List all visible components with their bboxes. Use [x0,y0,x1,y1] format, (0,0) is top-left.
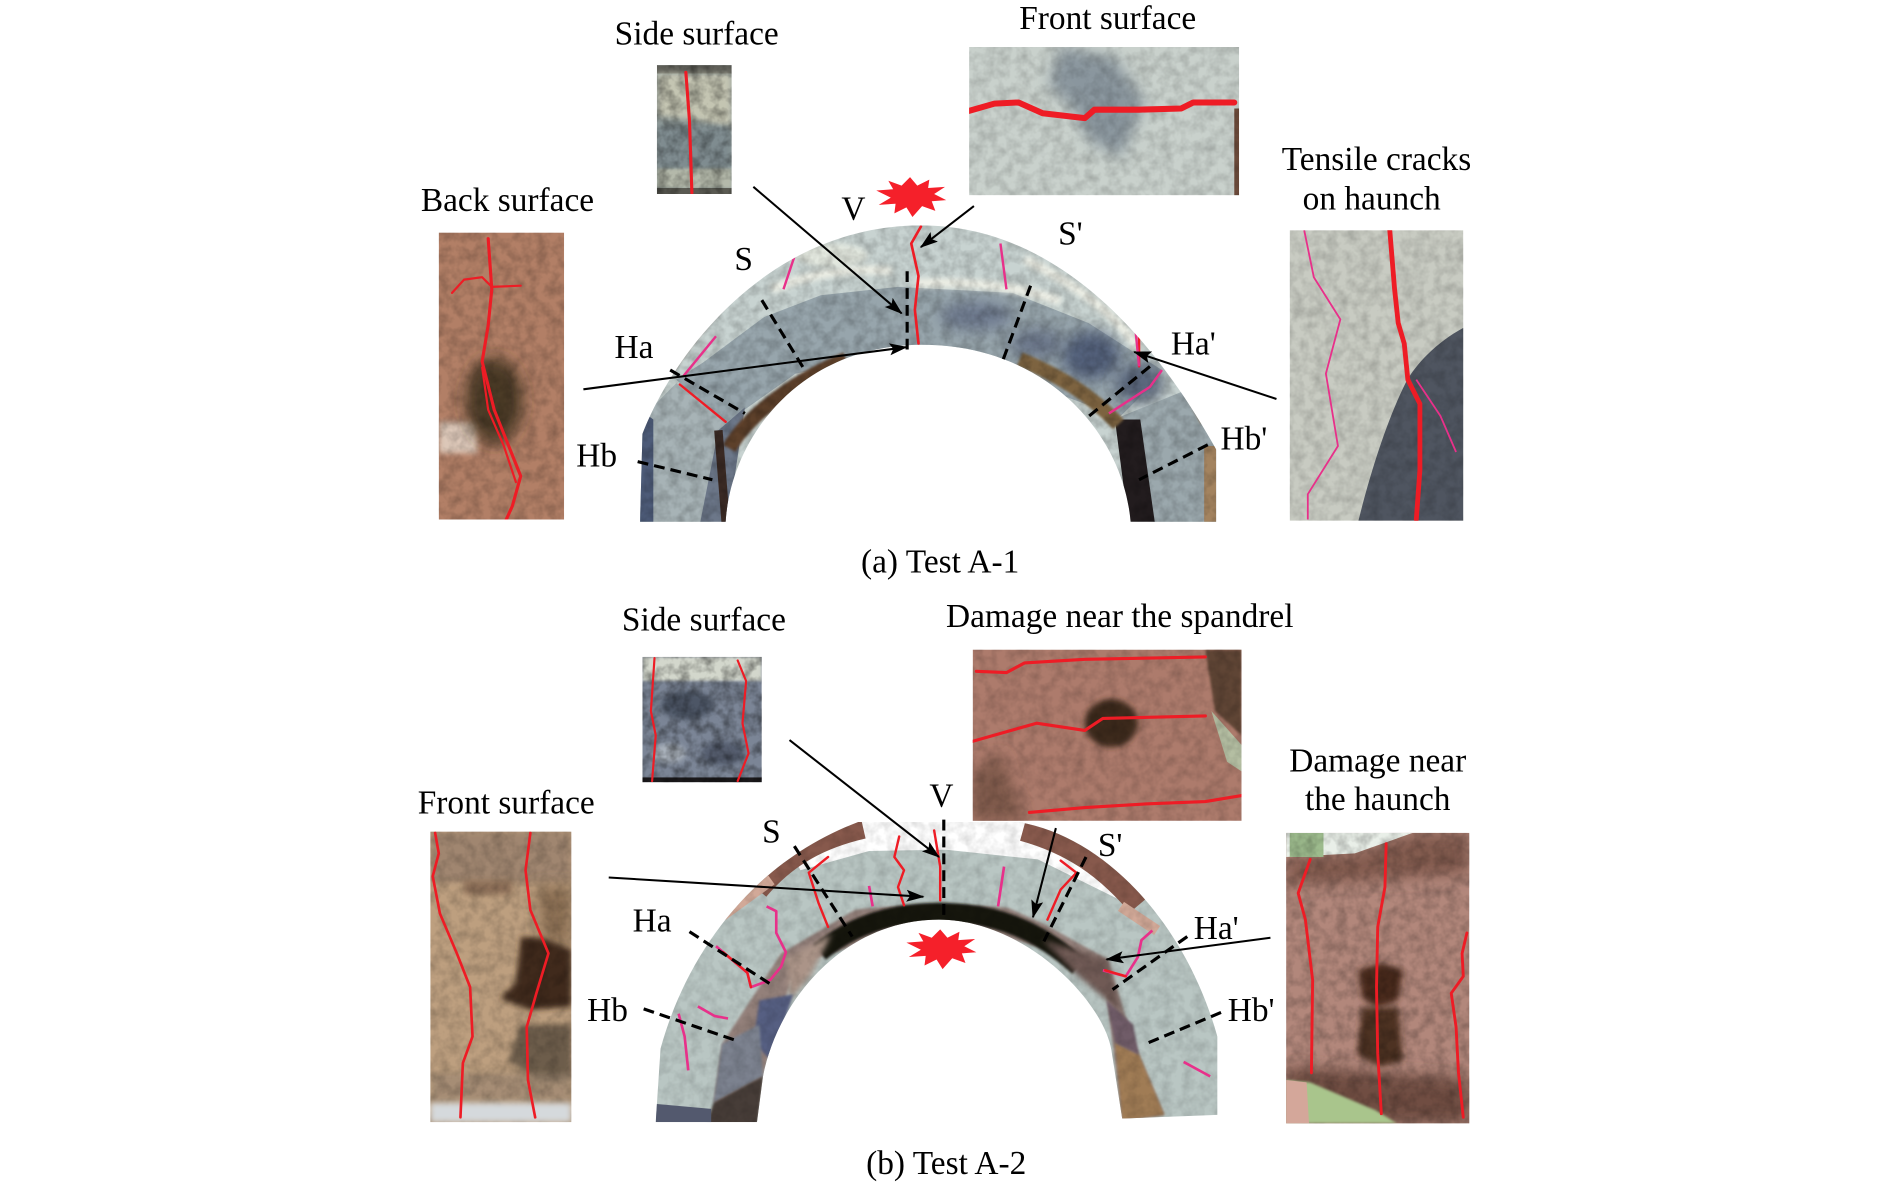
heading: tensile cracks on haunch: on haunch [1303,181,1441,218]
panel: Test A-1 [421,0,1471,581]
heading: damage near the haunch: the haunch [1305,781,1451,818]
icon: impact burst A-1 [876,177,946,217]
caption: Test A-2: (b) Test A-2 [866,1145,1026,1182]
photo: tensile cracks on haunch [1290,230,1463,521]
arrow: haunch damage [1107,938,1270,959]
heading: side surface A-2: Side surface [622,601,786,638]
heading: damage near the spandrel: Damage near the spandrel [946,598,1294,635]
photo: damage near the spandrel [973,650,1242,821]
section lines A-1 [638,271,1208,480]
section labels A-2: S [762,814,781,851]
photo: front surface A-1 [969,47,1239,195]
arrow: tensile cracks to haunch [1134,352,1276,399]
section labels A-1: V [841,190,865,227]
photo: side surface A-1 [657,65,732,194]
arch lower right block [1120,391,1220,522]
arch photo A-2 [645,814,1229,1127]
section labels A-2: V [929,777,953,814]
arrow: spandrel damage [1033,828,1056,917]
arrow: side surface to crown [753,187,902,313]
section labels A-1: Hb [576,437,617,474]
section labels A-1: S' [1058,216,1083,253]
arch brown rim [753,822,1143,902]
section labels A-2: Ha [633,903,672,940]
heading: tensile cracks on haunch [1282,141,1471,218]
section labels A-1: Ha' [1171,325,1216,362]
arrow: front surface to crown [921,206,974,247]
heading: side surface A-1: Side surface [615,16,779,53]
heading: front surface A-2: Front surface [418,785,595,822]
heading: front surface A-1: Front surface [1019,0,1196,37]
arch dark band over crown [820,912,1079,967]
heading: back surface: Back surface [421,182,594,219]
arch lower left block [636,383,745,522]
arch photo A-1 [633,217,1223,530]
arch intrados face [676,287,1162,423]
section labels A-2: Ha' [1194,910,1239,947]
panel: Test A-2 [418,598,1469,1182]
arch white top zone [794,822,1132,898]
arrow: side surface to crown [790,740,939,857]
photo: front surface A-2 [430,832,571,1122]
photo: side surface A-2 [642,657,762,782]
section labels A-2: Hb [587,992,628,1029]
heading: damage near the haunch: Damage near [1289,742,1466,779]
photo: back surface [439,233,564,519]
heading: tensile cracks on haunch: Tensile cracks [1282,141,1471,178]
arrow: front surface to intrados [609,877,923,897]
section labels A-1: Ha [615,329,654,366]
section labels A-2: S' [1098,827,1122,864]
section labels A-2 [587,777,1275,1029]
section lines A-2 [644,820,1221,1043]
caption: Test A-1: (a) Test A-1 [861,544,1019,581]
section labels A-1 [576,190,1267,474]
arch cracks [809,830,1076,927]
icon: impact burst A-2 [906,929,976,969]
section labels A-2: Hb' [1228,992,1275,1029]
arch cracks [911,227,921,344]
arch brown edges [729,359,846,448]
section labels A-1: Hb' [1221,421,1267,458]
arrow: back surface to crown [583,347,906,389]
heading: damage near the haunch [1289,742,1466,818]
arch highlights [771,259,1139,350]
arch intrados [714,906,1164,1122]
section labels A-1: S [734,241,753,278]
photo: damage near the haunch [1286,833,1469,1123]
